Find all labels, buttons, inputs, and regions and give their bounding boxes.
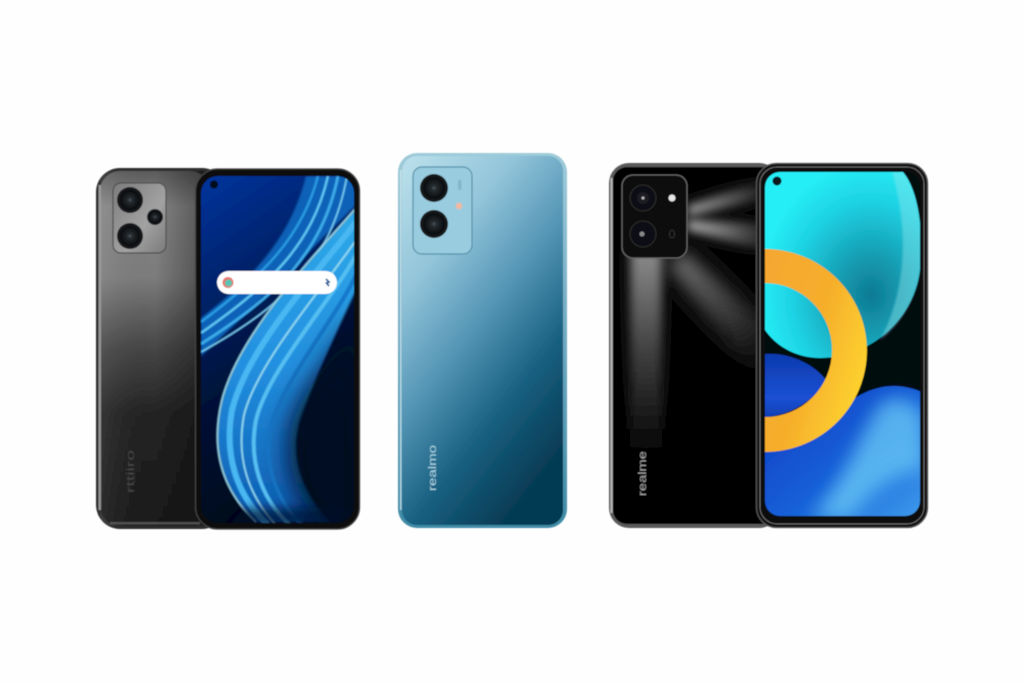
phone 1 rear body bbox=[95, 167, 210, 530]
lower blue shape bbox=[765, 386, 922, 520]
phone 1 front frame bbox=[196, 169, 360, 529]
phone 3 rear logo: realme bbox=[637, 451, 649, 496]
illustration: three smartphones bbox=[95, 152, 929, 530]
phone 1 rear logo: rttiiro bbox=[125, 450, 137, 493]
phone 1 search bar bbox=[217, 271, 337, 294]
phone 3: black rear and colourful screen bbox=[609, 163, 928, 528]
phone 1 screen with blue wave bbox=[201, 176, 360, 530]
phone 3 camera hole bbox=[772, 176, 782, 186]
phone 3 rear body bbox=[609, 163, 779, 528]
dark fade over lower right of the wave bbox=[290, 315, 360, 530]
phone 1 camera hole bbox=[210, 180, 218, 188]
phone 3 camera module bbox=[622, 175, 687, 258]
phone 3 rear light rays bbox=[630, 178, 770, 465]
teal shape bbox=[765, 172, 921, 358]
phone 3 screen wallpaper bbox=[765, 172, 924, 520]
phone 2 camera module bbox=[413, 167, 472, 254]
phone 2 rear logo: realmo bbox=[427, 445, 439, 491]
phone 2: blue gradient rear bbox=[398, 153, 567, 528]
phone 3 front frame bbox=[756, 164, 928, 528]
phone 1 camera module bbox=[113, 183, 166, 253]
small blue shape bbox=[765, 354, 826, 417]
lower wave band bbox=[217, 208, 360, 530]
phone 2 body bbox=[398, 153, 567, 528]
upper wave band bbox=[201, 176, 356, 356]
yellow ring bbox=[765, 249, 867, 452]
phone 1: dark grey rear and blue wave screen bbox=[96, 168, 360, 530]
